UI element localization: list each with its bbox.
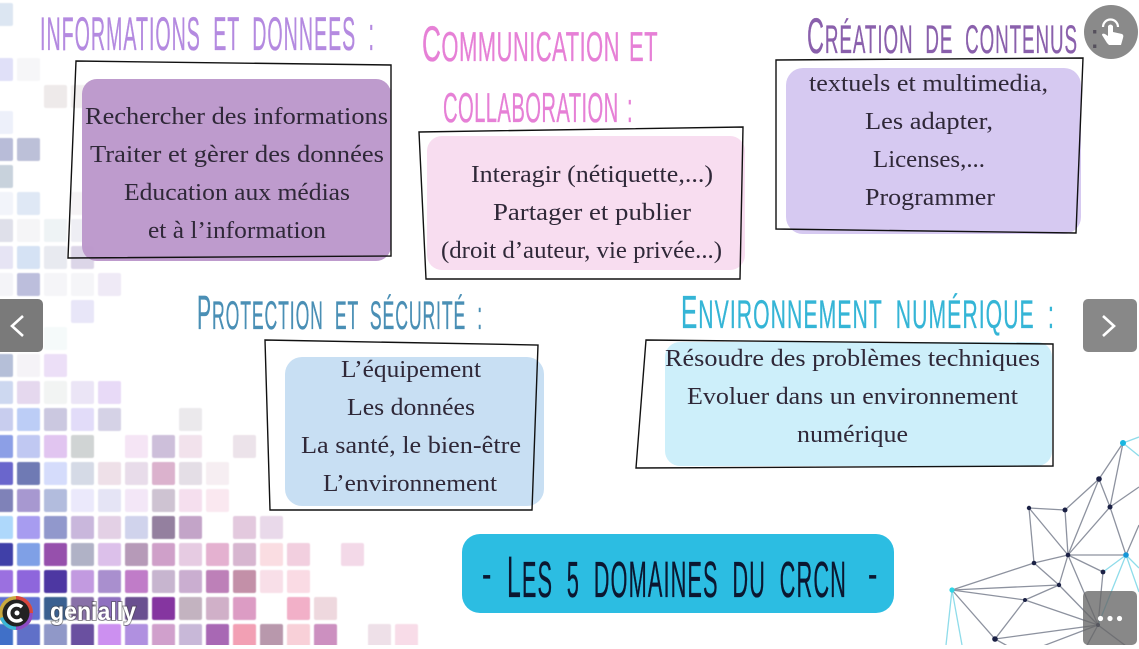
network graphic — [946, 437, 1139, 649]
text block: et à l’information — [148, 218, 326, 244]
button: previous — [0, 299, 43, 352]
panel: protection et sécurité — [197, 287, 544, 510]
text block: Evoluer dans un environnement — [687, 384, 1018, 410]
heading: communication et collaboration — [422, 16, 658, 131]
box background — [285, 357, 544, 506]
text block: Licenses,... — [873, 147, 985, 173]
heading: communication et collaboration: COLLABORATION : — [443, 84, 633, 131]
box background — [786, 68, 1081, 234]
text block: La santé, le bien-être — [301, 433, 521, 459]
text block: Interagir (nétiquette,...) — [471, 162, 713, 188]
text block: Traiter et gèrer des données — [90, 142, 384, 168]
icon: touch button — [1084, 5, 1138, 59]
logo wordmark: genially — [50, 598, 136, 626]
text block: textuels et multimedia, — [809, 71, 1048, 97]
text block: Programmer — [865, 185, 995, 211]
panel: informations et données — [40, 7, 391, 261]
genially logo — [0, 596, 136, 630]
text block: Les données — [347, 395, 475, 421]
heading colon over touch button: : — [1090, 18, 1099, 56]
title banner — [462, 534, 894, 613]
box background — [82, 79, 391, 261]
panel: communication et collaboration — [419, 16, 745, 279]
background pixel mosaic — [0, 3, 418, 647]
text block — [665, 346, 1040, 448]
text: INFORMATIONS ET DONNEES : — [40, 7, 375, 60]
text block — [809, 71, 1048, 211]
text block: numérique — [797, 422, 908, 448]
text block — [85, 104, 388, 244]
text block — [301, 357, 521, 497]
text block: Partager et publier — [493, 200, 691, 226]
text block: Rechercher des informations — [85, 104, 388, 130]
title: - — [482, 550, 493, 597]
text block: L’environnement — [323, 471, 497, 497]
box background — [427, 136, 745, 270]
title: - — [868, 550, 879, 597]
button: more options — [1083, 591, 1137, 645]
box background — [665, 342, 1052, 466]
heading: communication et collaboration: COMMUNICATION ET — [422, 16, 658, 72]
title — [482, 545, 879, 610]
text block: Résoudre des problèmes techniques — [665, 346, 1040, 372]
panel: protection et sécurité: PROTECTION ET SÉCURITÉ : — [197, 287, 483, 340]
panel: création de contenus — [776, 8, 1083, 234]
text block: Education aux médias — [124, 180, 350, 206]
panel: environnement numérique — [636, 286, 1055, 468]
text block: (droit d’auteur, vie privée...) — [441, 238, 722, 264]
button: next — [1083, 299, 1137, 352]
text block: Les adapter, — [865, 109, 993, 135]
text block: L’équipement — [341, 357, 481, 383]
text block — [441, 162, 722, 264]
